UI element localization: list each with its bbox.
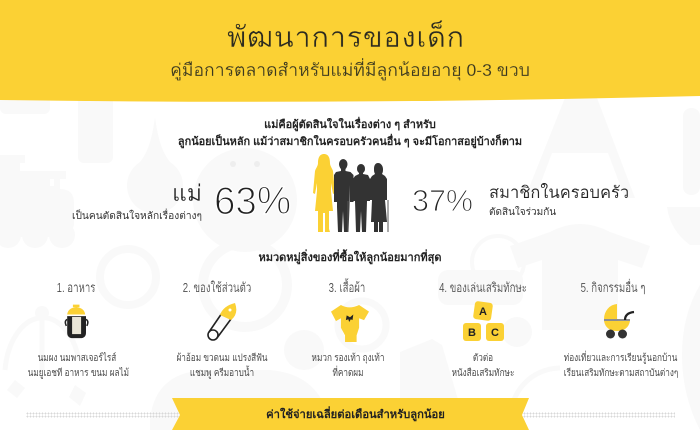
yellow header band: [0, 0, 700, 102]
icon: baby cup: [64, 304, 89, 338]
description: ตัวต่อ: [473, 353, 493, 364]
canes: [348, 200, 388, 232]
category 1: food: [28, 280, 129, 379]
intro text: ลูกน้อยเป็นหลัก แม้ว่าสมาชิกในครอบครัวคนอื่น ๆ จะมีโอกาสอยู่บ้างก็ตาม: [178, 136, 522, 148]
description: [312, 352, 384, 378]
description: แชมพู ครีมอาบน้ำ: [189, 368, 254, 378]
heading: 4. ของเล่นเสริมทักษะ: [439, 280, 527, 295]
label: mother: [72, 180, 202, 222]
dotted line left: [26, 412, 179, 418]
heading: 5. กิจกรรมอื่น ๆ: [581, 280, 645, 295]
subtitle: คู่มือการตลาดสำหรับแม่ที่มีลูกน้อยอายุ 0-3 ขวบ: [170, 60, 530, 80]
description: นมผง นมพาสเจอร์ไรส์: [38, 353, 116, 364]
section heading: หมวดหมู่สิ่งของที่ซื้อให้ลูกน้อยมากที่สุด: [258, 252, 442, 264]
label: family members: [489, 183, 629, 218]
title: พัฒนาการของเด็ก: [227, 22, 465, 54]
icon: yellow onesie: [331, 305, 369, 342]
grandmother figure: [370, 163, 387, 232]
heading: 3. เสื้อผ้า: [329, 280, 365, 295]
description: เรียนเสริมทักษะตามสถาบันต่างๆ: [564, 368, 678, 378]
description: หนังสือเสริมทักษะ: [452, 368, 514, 378]
description: ที่คาดผม: [332, 368, 364, 378]
mother figure: [313, 154, 335, 232]
label heading: family members: สมาชิกในครอบครัว: [489, 184, 629, 202]
icon: ABC blocks: C: [491, 327, 499, 339]
label heading: mother: แม่: [172, 180, 202, 206]
grandfather figure: [353, 164, 370, 232]
dotted line right: [523, 412, 675, 418]
icon: ABC blocks: B: [468, 327, 476, 339]
description: หมวก รองเท้า ถุงเท้า: [312, 353, 384, 364]
label note: family members: ตัดสินใจร่วมกัน: [489, 207, 556, 218]
heading: 1. อาหาร: [57, 280, 95, 295]
icon: stroller: [604, 304, 634, 338]
category 4: toys: [439, 280, 527, 378]
heading: 2. ของใช้ส่วนตัว: [183, 280, 251, 295]
stat: 63 percent: 63%: [214, 180, 291, 223]
category 3: clothing: [312, 278, 384, 378]
intro text: แม่คือผู้ตัดสินใจในเรื่องต่าง ๆ สำหรับ: [264, 119, 436, 131]
description: ผ้าอ้อม ขวดนม แปรงสีฟัน: [176, 353, 267, 364]
description: ท่องเที่ยวและการเรียนรู้นอกบ้าน: [564, 353, 677, 364]
description: นมยูเอชที อาหาร ขนม ผลไม้: [28, 368, 129, 378]
stat: 37 percent: 37%: [412, 184, 473, 218]
description: [564, 350, 678, 378]
icon: ABC blocks: A: [479, 306, 487, 318]
label note: mother: เป็นคนตัดสินใจหลักเรื่องต่างๆ: [72, 211, 202, 222]
icon: family silhouettes: [313, 154, 388, 232]
icon: safety pin: [207, 303, 236, 341]
icon: ABC blocks: [463, 301, 504, 341]
intro text: [178, 116, 522, 148]
category 5: other activities: [564, 278, 678, 378]
father figure: [334, 159, 354, 232]
description: [28, 352, 129, 379]
category 2: personal items: [176, 280, 268, 379]
description: [452, 353, 514, 378]
description: [176, 352, 268, 379]
ribbon text: ค่าใช้จ่ายเฉลี่ยต่อเดือนสำหรับลูกน้อย: [266, 409, 445, 421]
